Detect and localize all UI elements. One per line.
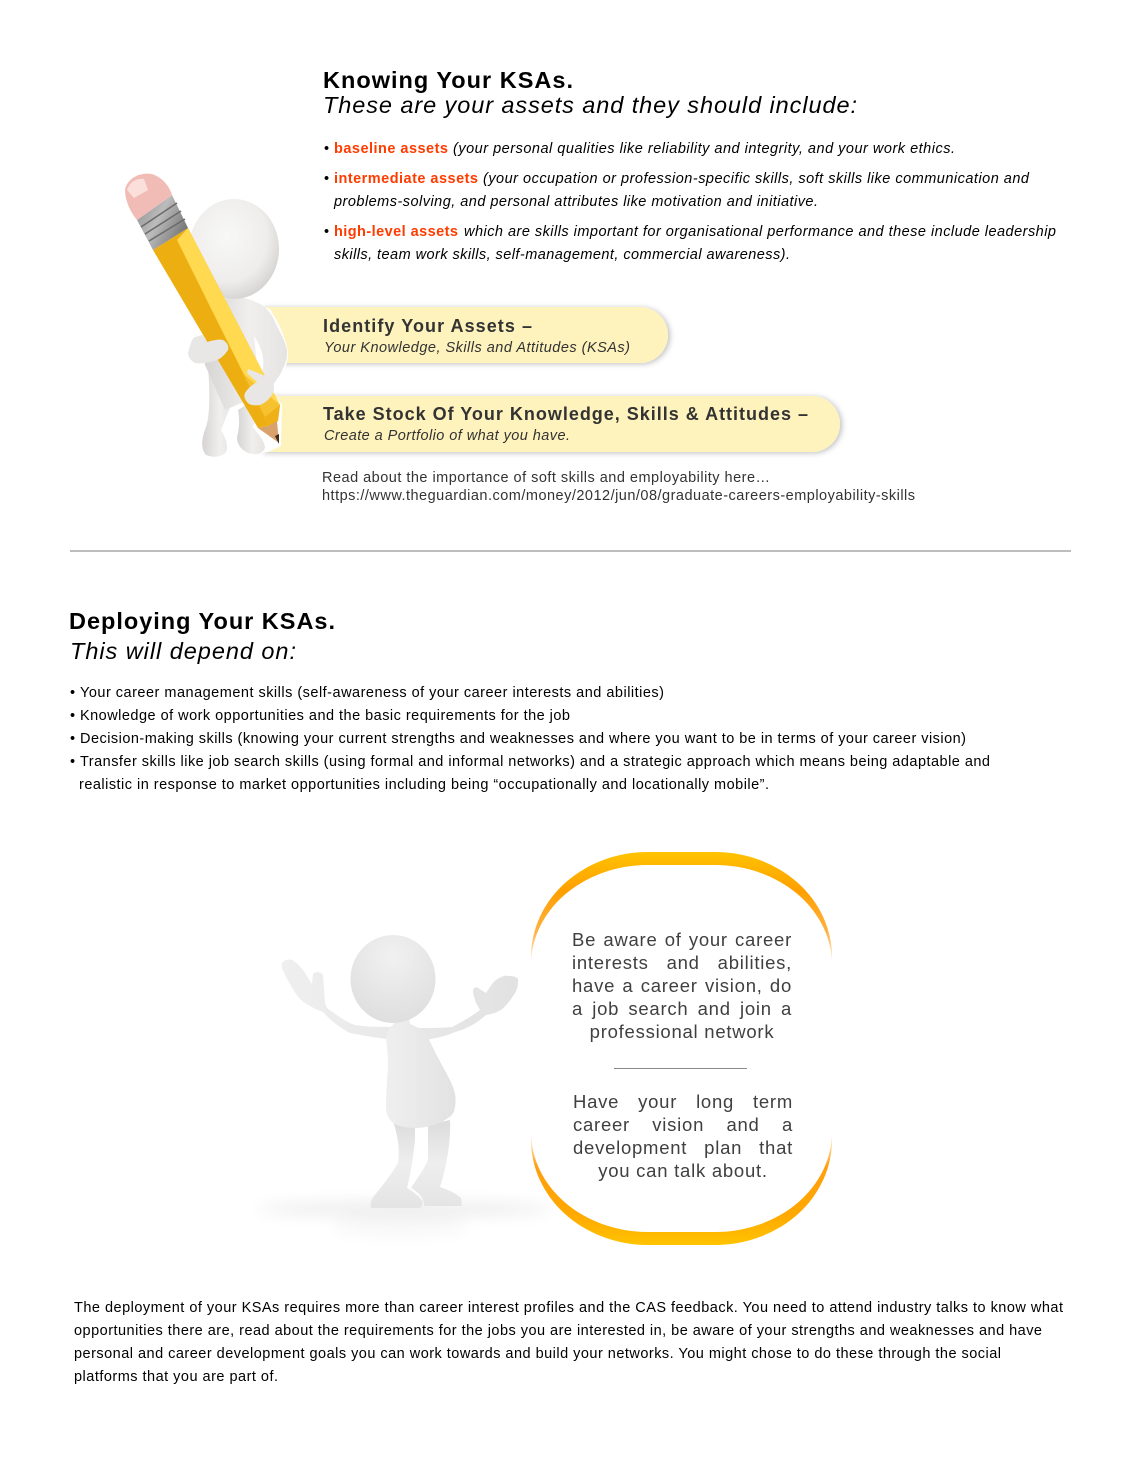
floor shadow — [255, 1203, 555, 1236]
text block: asset list: which are skills important for organisational performance and these include leadership — [464, 224, 1056, 240]
bubble text: first statement — [572, 929, 792, 1042]
banner: Take Stock: Take Stock Of Your Knowledge, Skills & Attitudes – — [323, 404, 808, 424]
text block: deployment list: realistic in response to market opportunities including being “occupationally and locationally mobile”. — [79, 777, 769, 793]
heading: Deploying Your KSAs: This will depend on: — [70, 638, 296, 664]
bubble text: first statement: Be aware of your career — [572, 929, 792, 950]
heading: Deploying Your KSAs — [69, 608, 335, 664]
text block: further reading link: Read about the importance of soft skills and employability here… — [322, 470, 770, 486]
text block: asset list: intermediate assets — [334, 171, 478, 187]
bubble text: first statement: a job search and join a — [572, 998, 792, 1019]
bubble text: second statement: career vision and a — [573, 1114, 793, 1135]
text block: asset list: • — [324, 224, 329, 240]
text block: deployment list: • — [70, 731, 75, 747]
arms and hands — [282, 959, 518, 1039]
figure torso and arm — [203, 297, 287, 410]
text block: deployment list: Decision-making skills (knowing your current strengths and weaknesses and where you want to be in terms of your career vision) — [80, 731, 966, 747]
bubble text: first statement: professional network — [590, 1021, 774, 1042]
text block: deployment list: • — [70, 685, 75, 701]
text block: deployment list: Knowledge of work opportunities and the basic requirements for the job — [80, 708, 570, 724]
text block: further reading link: https://www.theguardian.com/money/2012/jun/08/graduate-careers-employability-skills — [322, 488, 915, 504]
banner: Take Stock — [262, 396, 840, 452]
figure halo against banners — [240, 300, 288, 456]
bubble text: first statement: interests and abilities, — [572, 952, 792, 973]
figure hands — [188, 335, 274, 405]
illustration: figure with raised arms — [255, 935, 555, 1236]
text block: deployment list — [70, 685, 990, 793]
text block: asset list: • — [324, 141, 329, 157]
banner: Identify Your Assets: Identify Your Assets – — [323, 316, 532, 336]
bubble text: second statement — [573, 1091, 793, 1181]
banner: Identify Your Assets — [262, 307, 668, 363]
heading: Deploying Your KSAs: Deploying Your KSAs. — [69, 608, 335, 634]
text block: further reading link — [322, 470, 915, 504]
text block: asset list: • — [324, 171, 329, 187]
closing paragraph: opportunities there are, read about the requirements for the jobs you are interested in, be aware of your strengths and weaknesses and have — [74, 1323, 1042, 1339]
text block: deployment list: • — [70, 708, 75, 724]
legs — [371, 1118, 462, 1208]
torso and neck — [386, 1016, 456, 1128]
title: Knowing Your KSAs — [323, 67, 857, 118]
figure legs — [202, 365, 265, 457]
text block: deployment list: • — [70, 754, 75, 770]
bubble text: second statement: you can talk about. — [598, 1160, 768, 1181]
text block: asset list: baseline assets — [334, 141, 448, 157]
text block: deployment list: Transfer skills like job search skills (using formal and informal networks) and a strategic approach which means being adaptable and — [80, 754, 990, 770]
banner: Identify Your Assets: Your Knowledge, Skills and Attitudes (KSAs) — [324, 340, 630, 356]
text block: asset list: skills, team work skills, self-management, commercial awareness). — [334, 247, 790, 263]
head — [350, 935, 436, 1023]
text block: asset list: high-level assets — [334, 224, 458, 240]
figure head — [189, 199, 279, 299]
title: Knowing Your KSAs: These are your assets and they should include: — [323, 92, 857, 118]
closing paragraph: personal and career development goals you can work towards and build your networks. You might chose to do these through the social — [74, 1346, 1001, 1362]
text block: asset list — [324, 141, 1056, 263]
closing paragraph: The deployment of your KSAs requires more than career interest profiles and the CAS feedback. You need to attend industry talks to know what — [74, 1300, 1063, 1316]
text block: asset list: (your personal qualities like reliability and integrity, and your work ethics. — [453, 141, 955, 157]
illustration: figure holding pencil — [125, 174, 288, 457]
pencil — [125, 174, 282, 445]
text block: deployment list: Your career management skills (self-awareness of your career interests and abilities) — [80, 685, 664, 701]
bubble text: first statement: have a career vision, do — [572, 975, 792, 996]
title: Knowing Your KSAs: Knowing Your KSAs. — [323, 67, 573, 93]
text block: asset list: (your occupation or profession-specific skills, soft skills like communication and — [483, 171, 1030, 187]
speech bubble — [531, 852, 832, 1245]
bubble text: second statement: development plan that — [573, 1137, 793, 1158]
text block: asset list: problems-solving, and personal attributes like motivation and initiative. — [333, 194, 818, 210]
bubble text: second statement: Have your long term — [573, 1091, 793, 1112]
closing paragraph: platforms that you are part of. — [74, 1369, 278, 1385]
closing paragraph — [74, 1300, 1063, 1385]
banner: Take Stock: Create a Portfolio of what you have. — [324, 428, 570, 444]
